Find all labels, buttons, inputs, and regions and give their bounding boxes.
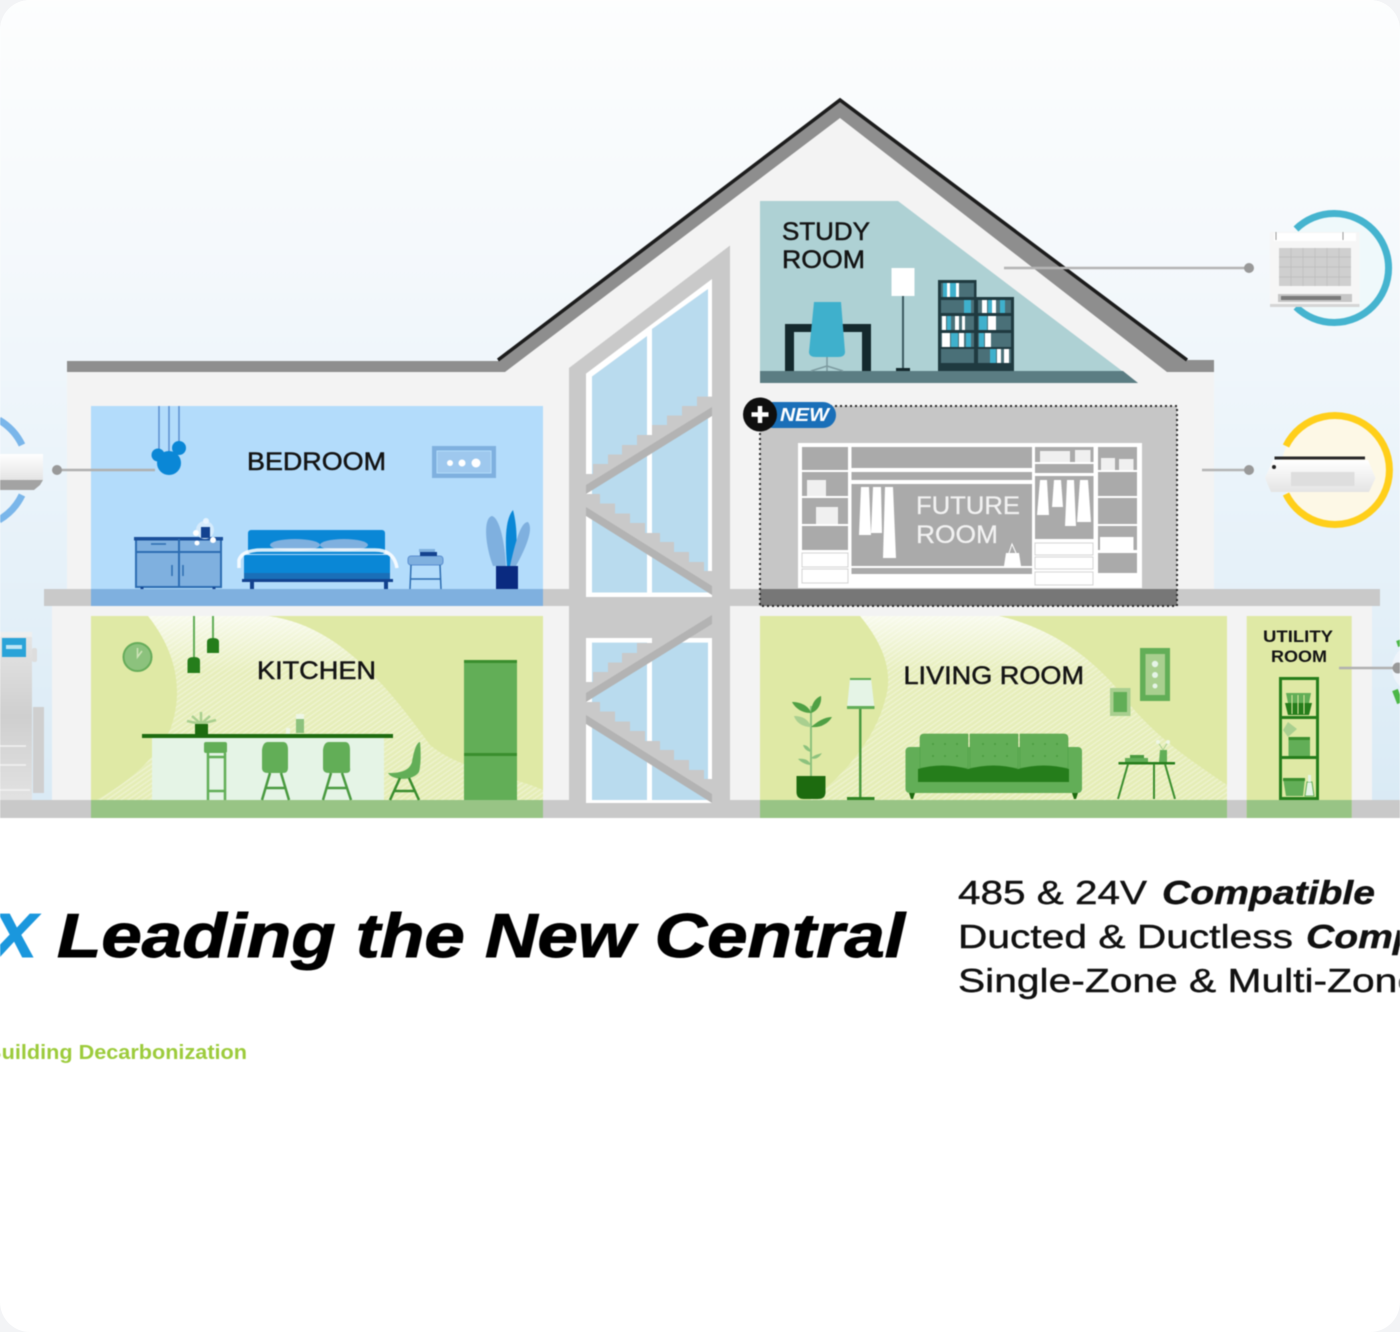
connector: utility room to ducted unit bbox=[1339, 662, 1400, 674]
flower vase bbox=[193, 518, 216, 546]
dresser bbox=[134, 537, 223, 589]
connector: bedroom to wall unit bbox=[52, 465, 155, 475]
panel: living room bbox=[760, 616, 1227, 818]
counter plant and glasses bbox=[187, 712, 304, 734]
icon: ducted unit in green ring bbox=[1392, 640, 1400, 703]
living room label: LIVING ROOM bbox=[904, 662, 1084, 690]
counter bbox=[142, 734, 393, 800]
feature list: Ducted & Ductless bbox=[958, 918, 1293, 955]
wardrobe bbox=[798, 443, 1142, 588]
stair flights lower bbox=[586, 605, 712, 803]
bar stool bbox=[204, 742, 227, 800]
shelving unit bbox=[1280, 678, 1318, 798]
icon: four-way ceiling unit in teal ring bbox=[1270, 213, 1389, 322]
utility room label: UTILITY bbox=[1263, 628, 1333, 646]
desk bbox=[785, 324, 871, 371]
sofa bbox=[906, 734, 1082, 799]
pendant lights bbox=[152, 406, 186, 475]
panel: future room bbox=[760, 406, 1177, 606]
clock bbox=[124, 643, 152, 671]
connector: study room to ceiling unit bbox=[1004, 263, 1254, 273]
house structure bbox=[0, 100, 1400, 818]
kitchen label: KITCHEN bbox=[257, 657, 376, 685]
fridge bbox=[464, 660, 517, 800]
side table bbox=[1118, 740, 1175, 799]
nightstand bbox=[408, 549, 443, 589]
title: Leading the New Central bbox=[57, 902, 907, 971]
feature list: Compatible bbox=[1162, 874, 1375, 911]
icon: cassette unit in yellow ring bbox=[1265, 415, 1389, 524]
pendant lamps bbox=[188, 616, 219, 673]
badge: plus new: NEW bbox=[780, 405, 831, 425]
feature list: Single-Zone & Multi-Zone bbox=[958, 962, 1400, 999]
panel: utility room bbox=[1247, 616, 1352, 818]
floor lamp bbox=[892, 268, 914, 371]
icon: wall-mounted unit in blue ring bbox=[0, 420, 43, 520]
wall art bbox=[1110, 648, 1170, 716]
connector: future room to cassette bbox=[1202, 465, 1254, 475]
badge: plus new bbox=[743, 398, 836, 432]
study room label: STUDY bbox=[782, 218, 870, 246]
potted plant bbox=[486, 510, 530, 589]
stair flights upper bbox=[586, 397, 712, 595]
chair bbox=[809, 302, 845, 371]
roof bbox=[67, 100, 1214, 372]
hanging clothes bbox=[859, 480, 1091, 566]
future room label: ROOM bbox=[916, 521, 998, 549]
staircase column with windows bbox=[569, 246, 730, 803]
tall plant bbox=[792, 696, 832, 799]
utility room label: ROOM bbox=[1271, 648, 1327, 666]
bar chairs bbox=[262, 742, 351, 800]
bedroom label: BEDROOM bbox=[247, 448, 386, 476]
side chair bbox=[388, 742, 421, 800]
panel: bedroom bbox=[91, 406, 543, 606]
bookcase bbox=[938, 280, 1014, 371]
panel: kitchen bbox=[91, 616, 543, 818]
feature list: 485 & 24V bbox=[958, 874, 1147, 911]
future room label: FUTURE bbox=[916, 492, 1020, 520]
wall panel bbox=[432, 446, 496, 478]
bed bbox=[239, 530, 397, 589]
study room label: ROOM bbox=[782, 246, 865, 274]
panel: study room bbox=[760, 201, 1138, 383]
icon: outdoor unit bbox=[0, 632, 44, 800]
feature list bbox=[958, 874, 1400, 999]
sky background bbox=[0, 0, 1400, 818]
floor lamp bbox=[847, 678, 874, 800]
